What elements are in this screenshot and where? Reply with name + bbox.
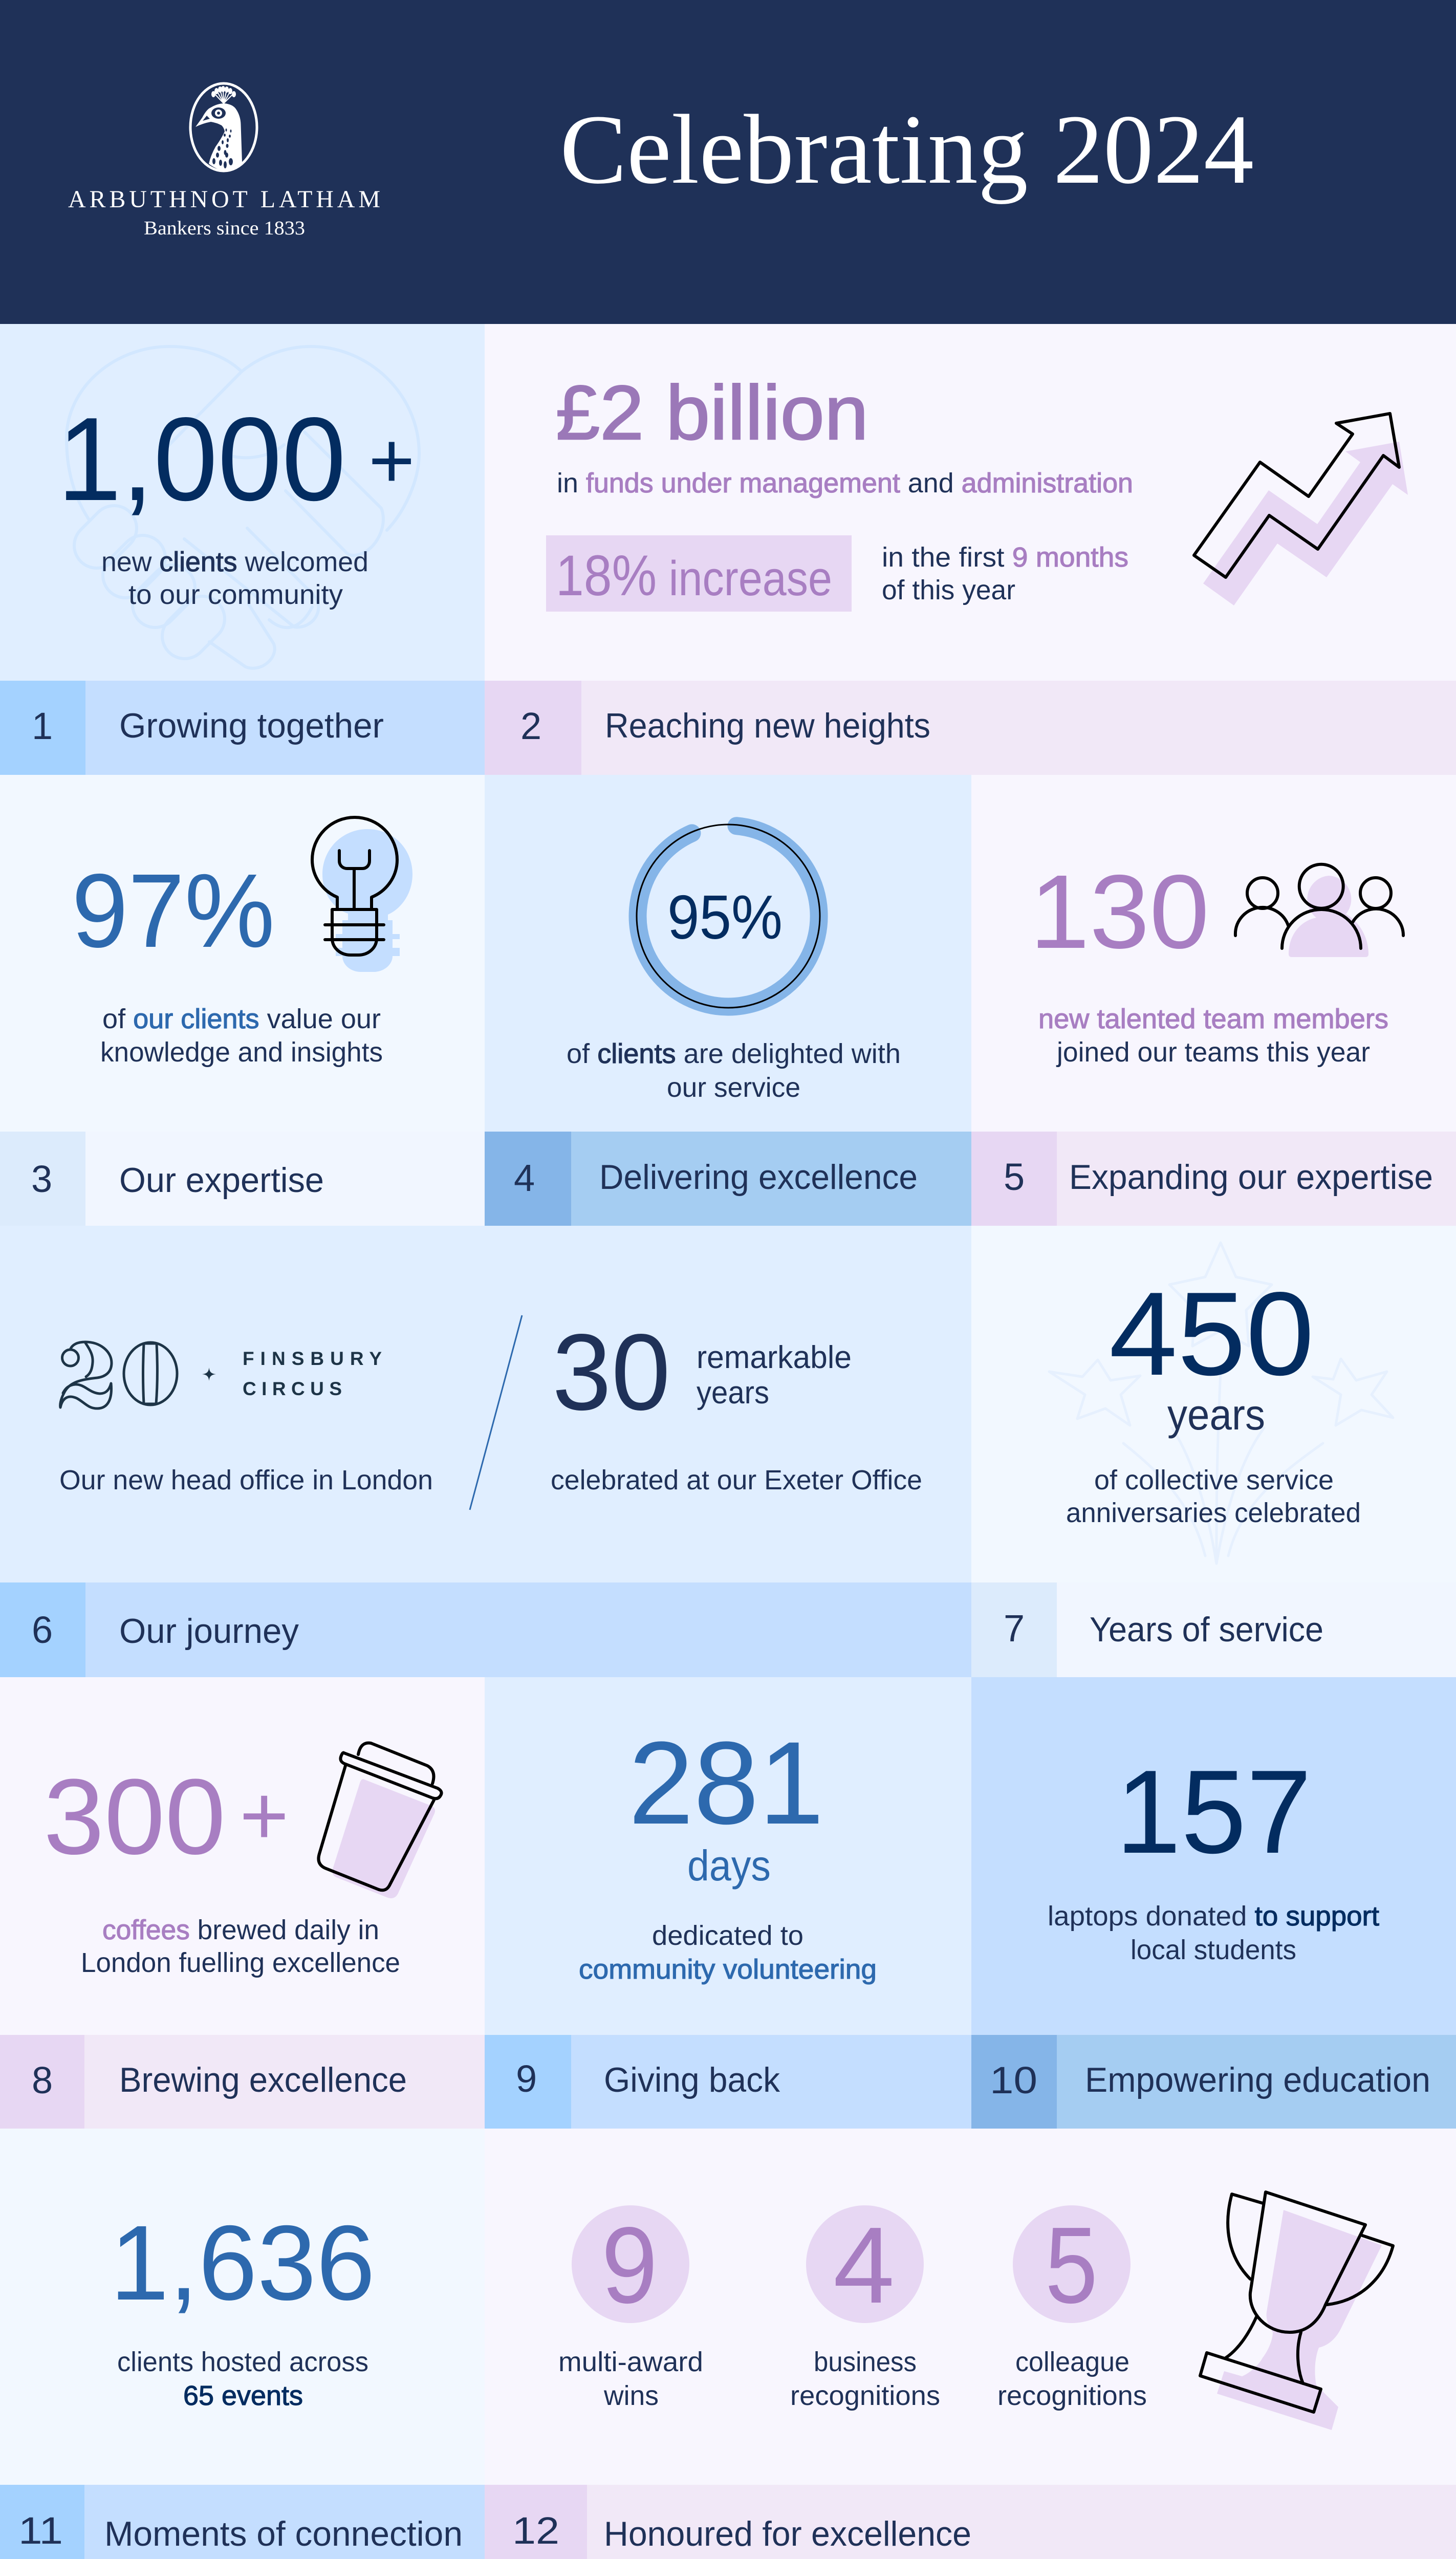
- label 8: [0, 2035, 485, 2129]
- stat: 9 multi-award wins: 9: [601, 2204, 658, 2326]
- stat: 130: 130: [1030, 853, 1209, 970]
- caption: laptops donated to support: [1048, 1901, 1379, 1932]
- label 1: 1: [32, 705, 53, 747]
- unit: days: days: [687, 1841, 771, 1890]
- stat: 450: 450: [1109, 1268, 1314, 1400]
- label 8: Brewing excellence: [119, 2061, 407, 2099]
- unit: years: years: [1167, 1391, 1265, 1439]
- caption: London fuelling excellence: [81, 1947, 400, 1978]
- logo wordmark: ARBUTHNOT LATHAM: [68, 186, 380, 213]
- label 8: 8: [32, 2059, 53, 2101]
- caption: [117, 2347, 368, 2411]
- stat: 2 billion: £2 billion: [556, 370, 868, 456]
- label 6: Our journey: [119, 1612, 299, 1651]
- label 7: Years of service: [1090, 1610, 1323, 1649]
- stat: 300: 300: [44, 1756, 226, 1877]
- caption: of our clients value our: [102, 1004, 381, 1034]
- panel 1: growing together: [0, 324, 485, 681]
- caption: joined our teams this year: [1056, 1037, 1370, 1068]
- label 3: 3: [31, 1158, 52, 1200]
- label 5: [971, 1132, 1456, 1226]
- label 6: [0, 1582, 971, 1677]
- stat: 157: 157: [1116, 1746, 1312, 1878]
- label 2: 2: [520, 705, 541, 747]
- header band: [0, 0, 1456, 324]
- caption: knowledge and insights: [100, 1037, 383, 1068]
- caption: [81, 1915, 400, 1978]
- label 5: 5: [1004, 1156, 1025, 1198]
- panel 7: years of service: [971, 1226, 1456, 1582]
- panel 12: honoured for excellence: [485, 2129, 1456, 2485]
- stat: 1,000: 1,000: [57, 393, 346, 526]
- label 11: [0, 2485, 485, 2559]
- label 12: Honoured for excellence: [604, 2514, 971, 2553]
- label 11: Moments of connection: [104, 2514, 463, 2553]
- logo: 20 Finsbury Circus: [60, 1342, 382, 1408]
- label 9: Giving back: [604, 2061, 780, 2099]
- stat: 5 colleague recognitions: recognitions: [997, 2380, 1147, 2411]
- label 1: [0, 681, 485, 775]
- caption: dedicated to: [652, 1920, 803, 1951]
- panel 10: empowering education: [971, 1677, 1456, 2035]
- period text: [882, 542, 1128, 605]
- logo: 20 Finsbury Circus: FINSBURY: [243, 1348, 382, 1369]
- stat: 9 multi-award wins: multi-award: [558, 2347, 703, 2377]
- label 12: 12: [512, 2509, 559, 2552]
- panel 3: our expertise: [0, 775, 485, 1132]
- label 7: 7: [1004, 1607, 1025, 1650]
- caption: of clients are delighted with: [567, 1038, 901, 1069]
- label 10: Empowering education: [1085, 2061, 1430, 2099]
- remarkable years: [697, 1340, 852, 1411]
- stat: 9 multi-award wins: wins: [603, 2380, 659, 2411]
- increase badge: 18% increase: [556, 544, 832, 608]
- caption: local students: [1131, 1935, 1296, 1965]
- label 9: 9: [516, 2057, 537, 2100]
- stat: 5 colleague recognitions: colleague: [1015, 2347, 1129, 2377]
- caption: community volunteering: [579, 1954, 877, 1985]
- stat: 30: 30: [552, 1311, 670, 1433]
- caption: head office: Our new head office in London: [59, 1465, 433, 1495]
- caption: our service: [667, 1072, 800, 1103]
- stat: 4 business recognitions: business: [814, 2347, 917, 2377]
- panel 11: moments of connection: [0, 2129, 485, 2485]
- label 10: [971, 2035, 1456, 2129]
- caption: clients hosted across: [117, 2347, 368, 2377]
- caption: anniversaries celebrated: [1066, 1498, 1361, 1528]
- caption: [567, 1038, 901, 1103]
- logo: Arbuthnot Latham peacock: [68, 83, 380, 239]
- caption: of collective service: [1094, 1465, 1334, 1495]
- panel 5: expanding our expertise: [971, 775, 1456, 1132]
- funds text: in funds under management and administration: [557, 468, 1133, 498]
- icon: team of people: [1235, 864, 1403, 957]
- plus sign: +: [368, 416, 415, 505]
- caption: Exeter office: celebrated at our Exeter Office: [551, 1465, 922, 1495]
- label 4: [485, 1132, 971, 1226]
- caption: [1048, 1901, 1379, 1965]
- logo tagline: Bankers since 1833: [144, 218, 305, 239]
- label 6: 6: [32, 1609, 53, 1651]
- icon: coffee cup: [318, 1743, 442, 1898]
- panel 9: giving back: [485, 1677, 971, 2035]
- caption: to our community: [128, 579, 343, 610]
- period text: of this year: [882, 575, 1015, 605]
- label 7: [971, 1582, 1456, 1677]
- stat: 5 colleague recognitions: 5: [1045, 2204, 1098, 2326]
- caption: new talented team members: [1038, 1004, 1388, 1034]
- panel 4: delivering excellence: [485, 775, 971, 1132]
- stat: 4 business recognitions: recognitions: [790, 2380, 940, 2411]
- remarkable years: years: [697, 1375, 769, 1411]
- label 2: [485, 681, 1456, 775]
- caption: [1038, 1004, 1388, 1068]
- icon: trophy: [1200, 2192, 1393, 2430]
- caption: 65 events: [183, 2380, 303, 2411]
- stat: 4 business recognitions: 4: [833, 2204, 895, 2326]
- stat: 4 business recognitions: [790, 2204, 940, 2411]
- stat: 281: 281: [628, 1717, 824, 1849]
- title: Celebrating 2024: [560, 94, 1254, 205]
- logo: 20 Finsbury Circus: CIRCUS: [243, 1378, 342, 1399]
- caption: [579, 1920, 877, 1985]
- caption: new clients welcomed: [101, 547, 368, 577]
- label 3: [0, 1132, 485, 1226]
- background icon: fireworks: [1049, 1243, 1393, 1564]
- caption: coffees brewed daily in: [102, 1915, 379, 1945]
- label 10: 10: [990, 2059, 1037, 2101]
- icon: light bulb: [312, 817, 412, 972]
- stat: 5 colleague recognitions: [997, 2204, 1147, 2411]
- plus sign: +: [240, 1768, 289, 1862]
- period text: in the first 9 months: [882, 542, 1128, 573]
- caption: [1066, 1465, 1361, 1528]
- panel 8: brewing excellence: [0, 1677, 485, 2035]
- caption: [100, 1004, 383, 1068]
- label 3: Our expertise: [119, 1161, 324, 1200]
- label 5: Expanding our expertise: [1069, 1158, 1433, 1197]
- label 4: Delivering excellence: [599, 1158, 918, 1197]
- stat: 97%: 97%: [72, 852, 275, 969]
- label 11: 11: [18, 2509, 63, 2552]
- label 12: [485, 2485, 1456, 2559]
- label 1: Growing together: [119, 706, 384, 745]
- chart: 95% ring: 95%: [667, 882, 783, 952]
- label 4: 4: [514, 1157, 535, 1199]
- divider: [470, 1315, 522, 1510]
- panel 2: reaching new heights: [485, 324, 1456, 681]
- label 2: Reaching new heights: [605, 706, 930, 745]
- stat: 1,636: 1,636: [110, 2204, 375, 2323]
- panel 6: our journey: [0, 1226, 971, 1582]
- chart: 95% ring: [637, 825, 820, 1008]
- icon: rising arrow: [1194, 414, 1408, 605]
- background icon: heart hands: [65, 346, 419, 668]
- label 9: [485, 2035, 971, 2129]
- remarkable years: remarkable: [697, 1340, 852, 1375]
- stat: 9 multi-award wins: [558, 2204, 703, 2411]
- caption: [101, 547, 368, 610]
